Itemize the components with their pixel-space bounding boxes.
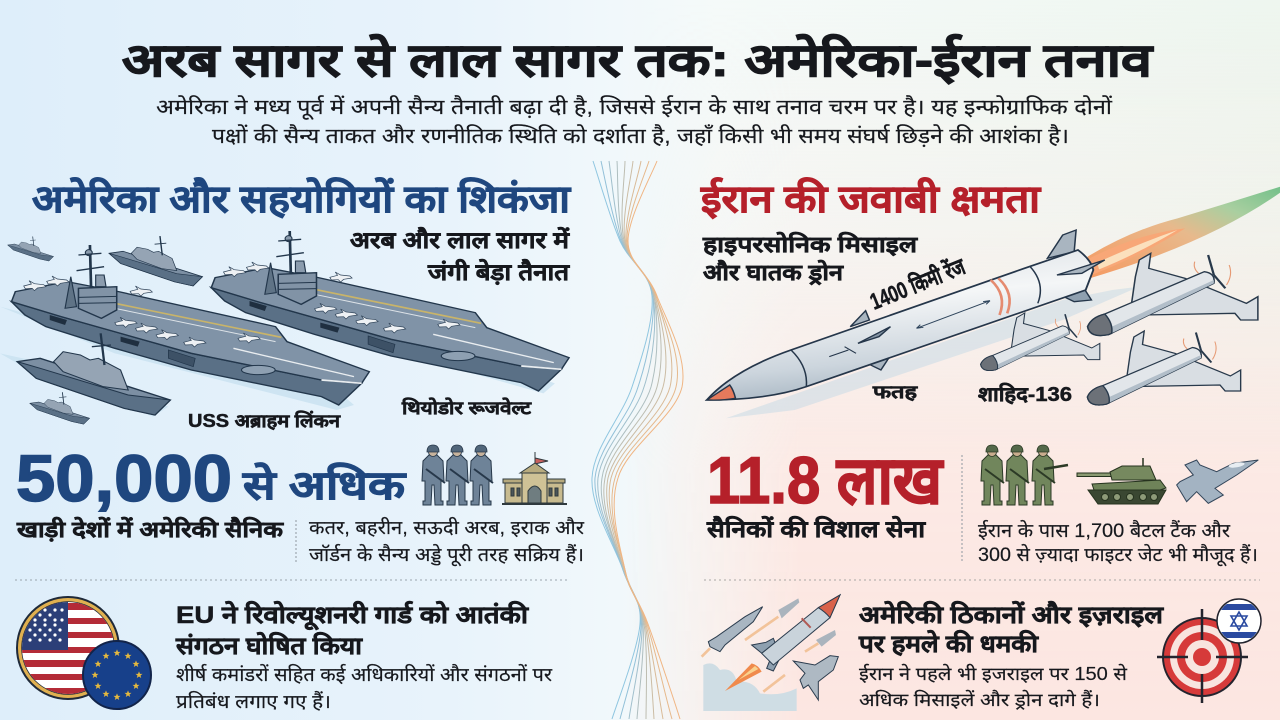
stat label: huge army: सैनिकों की विशाल सेना — [706, 515, 926, 542]
heading: EU designation: संगठन घोषित किया — [175, 632, 363, 660]
water wakes — [0, 293, 555, 417]
wave divider between the two sides — [592, 161, 683, 719]
illustration: Fattah missile with flame — [707, 187, 1280, 418]
stat: 1.18 million: 11.8 लाख — [707, 443, 944, 517]
icon: tank — [1077, 458, 1166, 504]
icon: missiles barrage — [702, 595, 840, 711]
subheading: hypersonic missile and drones — [702, 231, 918, 286]
label: Fattah: फतह — [872, 382, 919, 402]
label: Shahed-136: शाहिद-136 — [978, 382, 1072, 406]
text: sanctions: शीर्ष कमांडरों सहित कई अधिकारियों और संगठनों पर — [176, 663, 553, 686]
text: tanks and jets: ईरान के पास 1,700 बैटल टैंक और — [978, 519, 1231, 542]
illustration: Shahed drones — [981, 253, 1258, 405]
drone: small middle — [981, 313, 1100, 371]
flame — [1088, 187, 1280, 278]
escort: top — [109, 236, 202, 286]
text: bases: कतर, बहरीन, सऊदी अरब, इराक और — [309, 516, 585, 539]
stat: 50,000: से अधिक — [242, 462, 407, 508]
heading: US and allies: अमेरिका और सहयोगियों का शिकंजा — [32, 177, 571, 221]
heading: EU designation — [175, 601, 529, 660]
heading: threat of attacks: अमेरिकी ठिकानों और इज़राइल — [859, 601, 1165, 629]
carrier: Abraham Lincoln — [11, 245, 369, 405]
text: tanks and jets: 300 से ज़्यादा फाइटर जेट भी मौजूद हैं। — [978, 543, 1258, 567]
icon: soldiers — [422, 445, 493, 505]
text: sanctions: प्रतिबंध लगाए गए हैं। — [176, 690, 331, 713]
smoke cloud — [703, 663, 797, 711]
label: range: 1400 किमी रेंज — [866, 252, 969, 315]
illustration: naval fleet — [0, 231, 569, 424]
intro text: अमेरिका ने मध्य पूर्व में अपनी सैन्य तैनाती बढ़ा दी है, जिससे ईरान के साथ तनाव चरम पर है। यह इन्फोग्राफिक दोनों — [156, 95, 1113, 120]
intro text — [156, 95, 1113, 148]
text: sanctions — [176, 663, 553, 713]
icon: military base — [502, 452, 567, 504]
stat: 50,000 — [16, 441, 407, 515]
label: USS Abraham Lincoln: USS अब्राहम लिंकन — [188, 410, 341, 431]
heading: Iran response: ईरान की जवाबी क्षमता — [700, 177, 1041, 221]
label: Theodore Roosevelt: थियोडोर रूजवेल्ट — [401, 397, 532, 418]
subheading: fleet deployed: अरब और लाल सागर में — [350, 226, 570, 253]
icon: fighter jet — [1177, 460, 1258, 503]
subheading: fleet deployed — [350, 226, 570, 285]
stat label: US troops in Gulf: खाड़ी देशों में अमेरिकी सैनिक — [16, 516, 284, 542]
escort: far left — [8, 236, 54, 261]
heading: threat of attacks: पर हमले की धमकी — [858, 630, 1039, 658]
subheading: hypersonic missile and drones: हाइपरसोनिक मिसाइल — [702, 231, 918, 257]
text: past strikes — [859, 663, 1128, 710]
drone: top right — [1088, 253, 1258, 336]
escort: large lower — [17, 333, 170, 415]
text: past strikes: अधिक मिसाइलें और ड्रोन दागे हैं। — [859, 689, 1100, 710]
text: tanks and jets — [978, 519, 1258, 567]
subheading: hypersonic missile and drones: और घातक ड्रोन — [703, 259, 844, 286]
text: bases — [309, 516, 585, 567]
text: bases: जॉर्डन के सैन्य अड्डे पूरी तरह सक्रिय हैं। — [309, 543, 584, 567]
carrier: Theodore Roosevelt — [211, 231, 569, 391]
escort: small lower — [30, 392, 90, 424]
title: अरब सागर से लाल सागर तक: अमेरिका-ईरान तनाव — [122, 34, 1154, 86]
subheading: fleet deployed: जंगी बेड़ा तैनात — [427, 258, 570, 285]
heading: threat of attacks — [858, 601, 1165, 658]
icon: target with Israel flag — [1157, 599, 1262, 703]
drone: bottom right — [1087, 331, 1241, 405]
heading: EU designation: EU ने रिवोल्यूशनरी गार्ड को आतंकी — [176, 601, 529, 631]
intro text: पक्षों की सैन्य ताकत और रणनीतिक स्थिति को दर्शाता है, जहाँ किसी भी समय संघर्ष छिड़ने की आशंका है। — [212, 124, 1069, 148]
text: past strikes: ईरान ने पहले भी इजराइल पर 150 से — [859, 663, 1128, 684]
stat: 50,000: 50,000 — [16, 441, 232, 515]
range arrow — [917, 301, 990, 328]
icon: Iranian soldiers — [981, 445, 1068, 505]
icon: US and EU flags — [17, 597, 151, 709]
